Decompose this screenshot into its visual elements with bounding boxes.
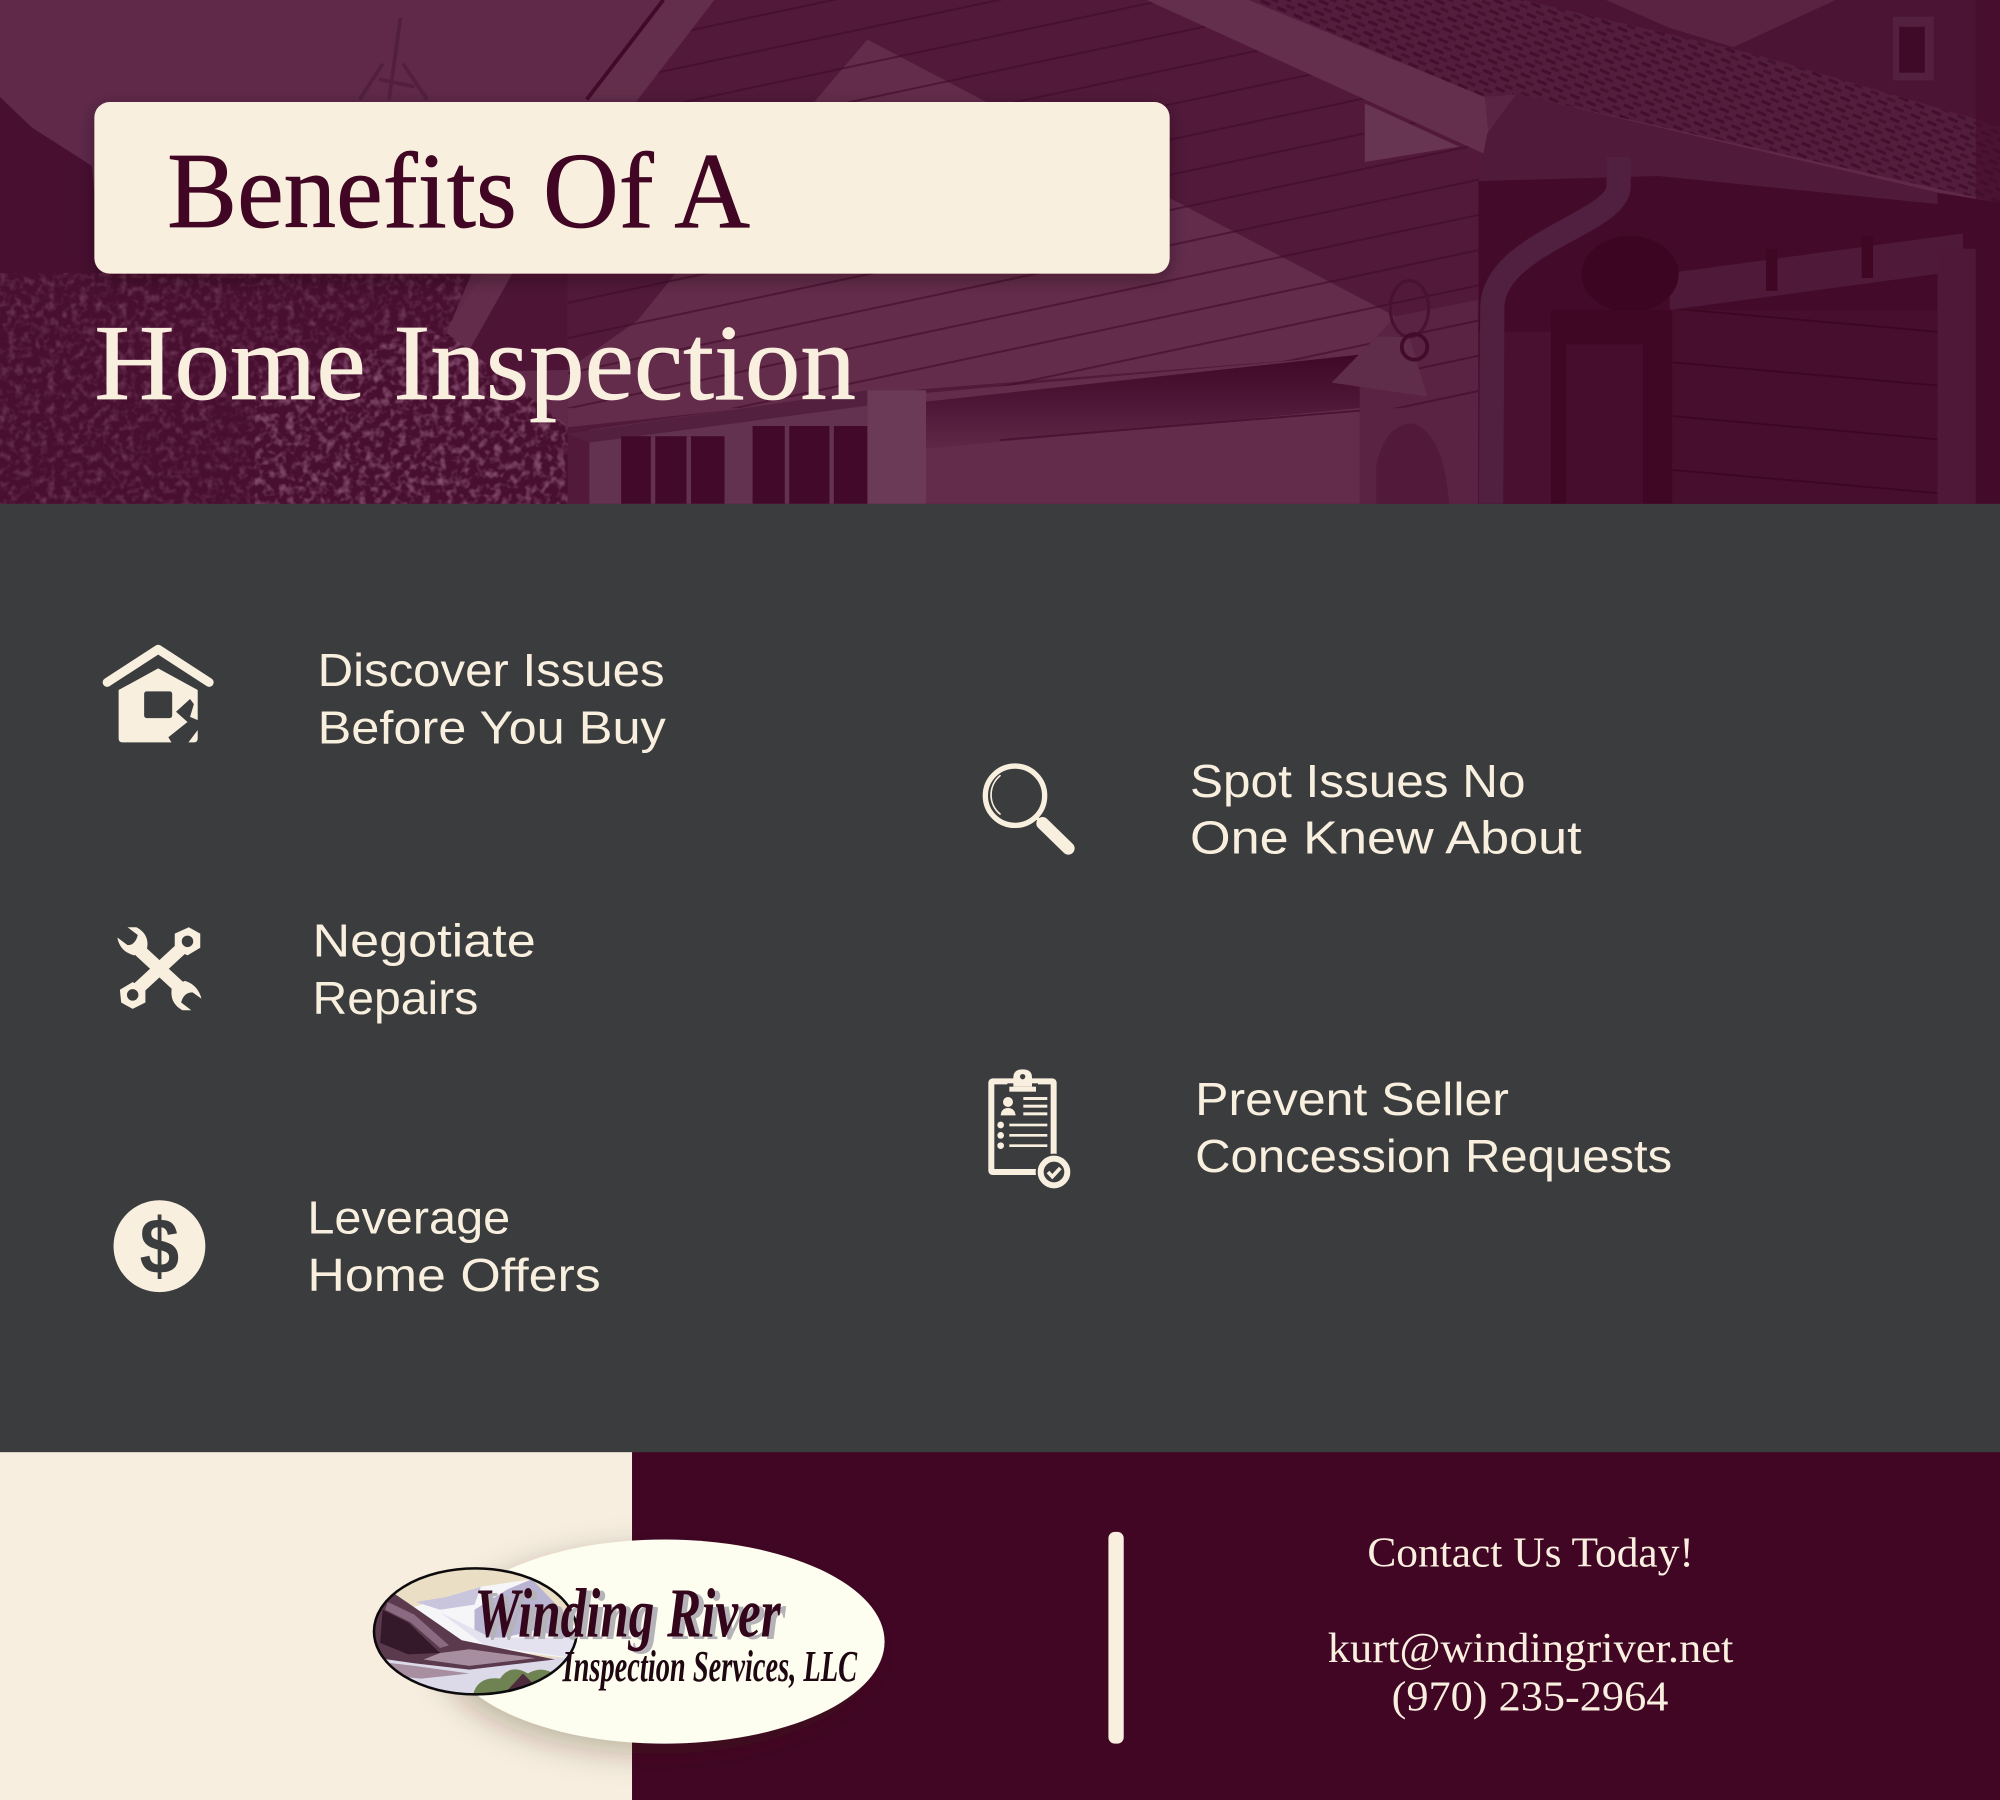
title: badge: [94, 102, 1170, 274]
text: prevent seller: Concession Requests: [1195, 1130, 1672, 1182]
logo: company name: Inspection Services, LLC: [562, 1641, 858, 1691]
roof: [1249, 0, 2000, 203]
item: prevent seller concession requests: [991, 1069, 1672, 1190]
item: spot issues: [985, 755, 1582, 863]
text: leverage home offers: Home Offers: [307, 1249, 601, 1301]
item: discover issues: [107, 644, 667, 754]
windows: [589, 406, 868, 504]
text: prevent seller: [1195, 1073, 1672, 1182]
icon: clipboard with check: [991, 1069, 1072, 1190]
text: discover issues: Discover Issues: [318, 644, 665, 696]
text: discover issues: [318, 644, 667, 754]
background: dark content panel: [0, 504, 2000, 1453]
trees: [0, 97, 568, 504]
item: negotiate repairs: [117, 915, 536, 1024]
item: leverage home offers: [114, 1191, 601, 1301]
icon: dollar coin: $: [140, 1201, 179, 1290]
text: leverage home offers: [307, 1191, 601, 1301]
contact block: [1328, 1529, 1734, 1720]
contact block: kurt@windingriver.net: [1328, 1625, 1734, 1672]
icon: dollar coin: [114, 1200, 205, 1292]
logo: mountain scene: [370, 1562, 580, 1700]
text: spot issues: Spot Issues No: [1190, 755, 1526, 807]
contact block: Contact Us Today!: [1367, 1529, 1694, 1576]
logo: Winding River: [370, 1540, 885, 1744]
text: spot issues: One Knew About: [1190, 811, 1582, 863]
logo: company name: Winding River: [480, 1577, 786, 1655]
text: negotiate repairs: Repairs: [312, 972, 478, 1024]
text: negotiate repairs: [312, 915, 536, 1024]
footer divider: [1108, 1532, 1124, 1744]
right wall: [1478, 94, 2000, 504]
footer: plum panel: [632, 1452, 2000, 1800]
lamp: [1332, 337, 1427, 397]
text: spot issues: [1190, 755, 1582, 863]
text: prevent seller: Prevent Seller: [1195, 1073, 1509, 1125]
title: line two: Home Inspection: [94, 303, 856, 423]
header photo: house exterior with plum tint: [0, 0, 2000, 504]
footer: cream panel: [0, 1452, 633, 1800]
text: leverage home offers: Leverage: [307, 1191, 510, 1243]
icon: cracked house: [107, 649, 209, 744]
text: negotiate repairs: Negotiate: [312, 915, 536, 967]
text: discover issues: Before You Buy: [318, 702, 667, 754]
logo: company name: [474, 1574, 858, 1691]
title: line one: Benefits Of A: [167, 131, 750, 251]
siding wall: [568, 0, 1491, 504]
logo: company name: Winding River: [474, 1574, 781, 1652]
contact block: (970) 235-2964: [1392, 1673, 1668, 1720]
icon: magnifying glass: [985, 766, 1068, 848]
garage door: [926, 355, 1360, 504]
icon: crossed wrenches: [117, 927, 202, 1010]
